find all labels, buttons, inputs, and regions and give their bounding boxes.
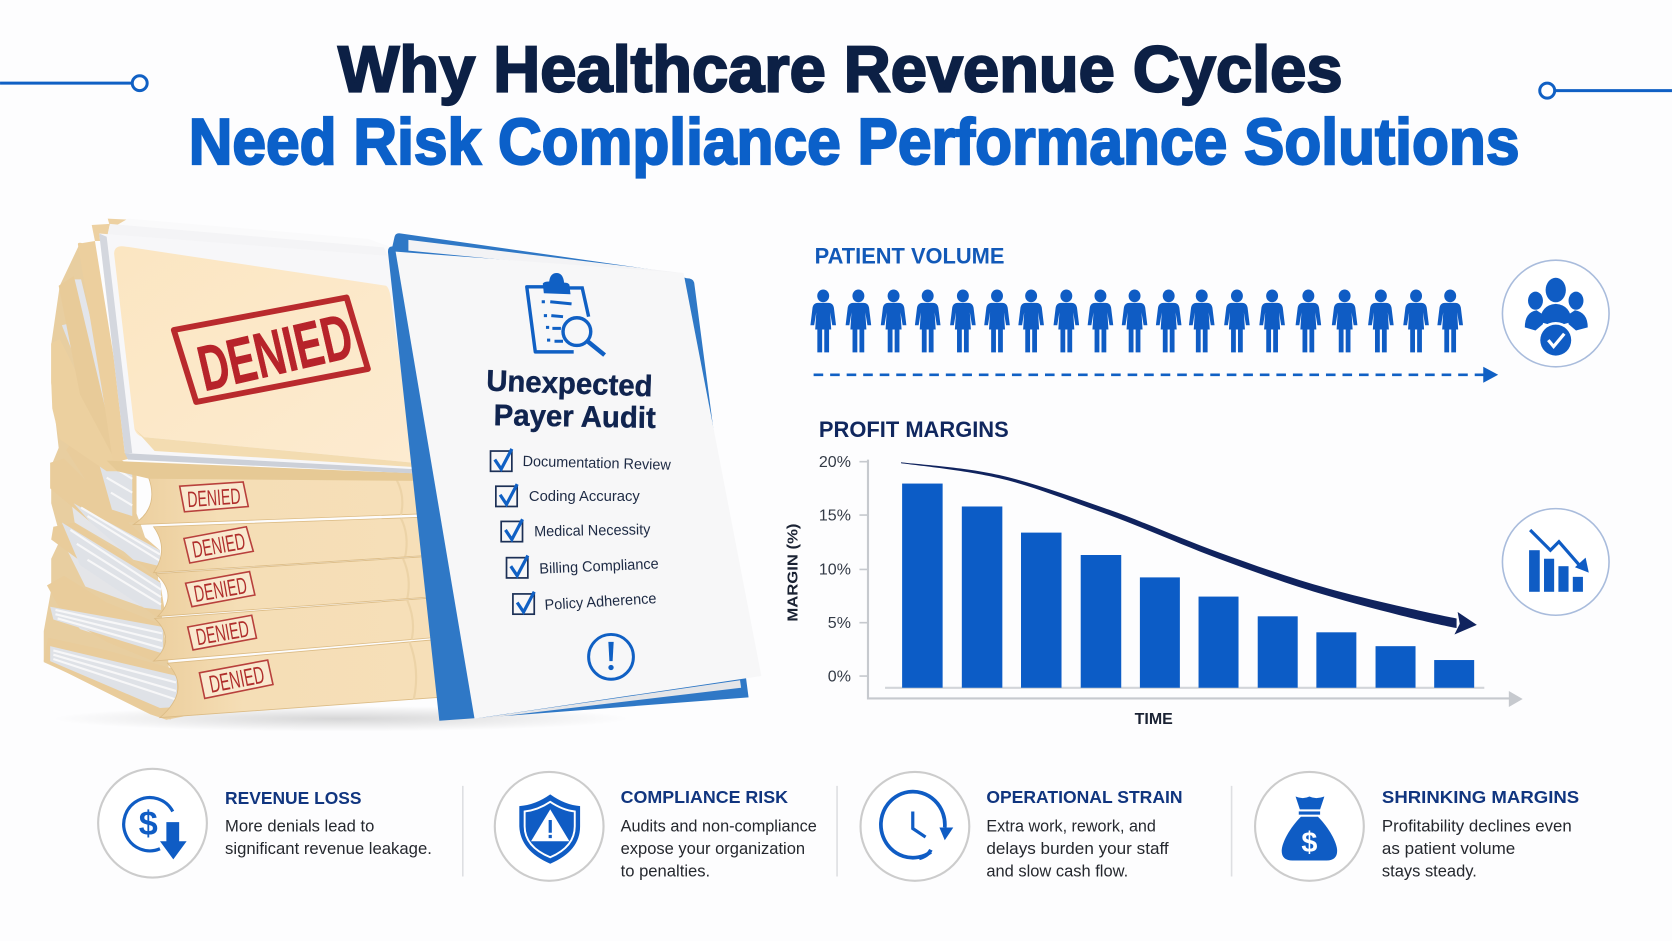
audit heading: Unexpected xyxy=(486,365,653,403)
description: revenue loss xyxy=(225,817,432,858)
description: compliance risk: to penalties. xyxy=(621,861,710,880)
icon: declining bar chart xyxy=(1502,509,1609,615)
x axis title: TIME xyxy=(1135,711,1173,728)
decorative left connector xyxy=(0,76,147,91)
top white paper sheets xyxy=(99,219,414,473)
icon: money bag: $ xyxy=(1301,827,1317,859)
description: operational strain: Extra work, rework, and xyxy=(986,817,1156,836)
description: shrinking margins: Profitability declines even xyxy=(1382,817,1572,836)
y axis title: MARGIN (%) xyxy=(785,524,802,622)
panel: patient volume xyxy=(810,243,1609,383)
y axis labels: 15% xyxy=(819,507,851,524)
y axis labels xyxy=(819,454,851,685)
folder band 5 with fanned papers xyxy=(44,638,439,720)
panel: revenue loss xyxy=(98,769,432,878)
audit heading: Payer Audit xyxy=(493,399,656,435)
illustration: stack of denied folders xyxy=(44,219,629,731)
folder band 5 with fanned papers: DENIED xyxy=(207,662,267,699)
icon: dollar with down arrow xyxy=(98,769,207,878)
panel: operational strain xyxy=(861,772,1183,881)
description: shrinking margins: as patient volume xyxy=(1382,839,1515,858)
icon: money bag xyxy=(1255,772,1364,881)
title xyxy=(189,33,1519,178)
heading: compliance risk: COMPLIANCE RISK xyxy=(621,787,788,807)
description: compliance risk: expose your organization xyxy=(621,839,805,858)
folder band 3 with fanned papers xyxy=(51,522,429,617)
y axis labels: 10% xyxy=(819,562,851,579)
row of 19 patient figures xyxy=(810,289,1463,352)
icon: dollar with down arrow: $ xyxy=(139,805,158,843)
description: compliance risk xyxy=(621,817,817,880)
description: revenue loss: significant revenue leakage. xyxy=(225,839,432,858)
description: revenue loss: More denials lead to xyxy=(225,817,374,836)
folder band 2 with fanned papers xyxy=(50,459,427,575)
panel: shrinking margins xyxy=(1255,772,1579,881)
paper xyxy=(396,252,761,719)
description: compliance risk: Audits and non-compliance xyxy=(621,817,817,836)
large front folder xyxy=(114,246,414,463)
folder band 4 with fanned papers: DENIED xyxy=(194,615,251,650)
description: shrinking margins xyxy=(1382,817,1572,880)
dividers xyxy=(463,786,1232,876)
checklist: Medical Necessity xyxy=(534,521,651,540)
description: shrinking margins: stays steady. xyxy=(1382,861,1477,880)
checklist: Billing Compliance xyxy=(539,555,659,578)
bar chart xyxy=(902,484,1474,688)
declining trend arrow xyxy=(901,462,1477,634)
checklist xyxy=(491,449,671,614)
title line 1: Why Healthcare Revenue Cycles xyxy=(338,33,1342,106)
description: operational strain: and slow cash flow. xyxy=(986,861,1128,880)
y axis labels: 20% xyxy=(819,454,851,471)
checklist: Policy Adherence xyxy=(544,590,657,614)
folder band 4 with fanned papers xyxy=(47,576,434,661)
blue folder xyxy=(388,233,749,721)
checklist: Coding Accuracy xyxy=(529,488,640,505)
big DENIED stamp: DENIED xyxy=(191,300,359,405)
illustration: unexpected payer audit document xyxy=(388,233,761,721)
upper fanned folder edges xyxy=(51,219,418,481)
panel: compliance risk xyxy=(495,772,817,881)
heading: shrinking margins: SHRINKING MARGINS xyxy=(1382,787,1579,807)
dashed arrow xyxy=(814,367,1498,383)
heading: revenue loss: REVENUE LOSS xyxy=(225,788,362,808)
description: operational strain: delays burden your staff xyxy=(986,839,1169,858)
heading: patient volume: PATIENT VOLUME xyxy=(815,243,1004,268)
y axis labels: 5% xyxy=(828,615,851,632)
heading: operational strain: OPERATIONAL STRAIN xyxy=(986,787,1183,807)
icon: exclamation alert xyxy=(589,634,633,679)
folder band 2 with fanned papers: DENIED xyxy=(190,528,247,563)
folder band 3 with fanned papers: DENIED xyxy=(192,572,249,607)
icon: patients with checkmark xyxy=(1502,260,1609,367)
description: operational strain xyxy=(986,817,1169,880)
decorative right connector xyxy=(1540,83,1672,98)
folder band 1 with fanned papers xyxy=(66,432,420,525)
axes xyxy=(859,460,1523,707)
heading: profit margins: PROFIT MARGINS xyxy=(819,417,1009,442)
big DENIED stamp xyxy=(174,297,368,405)
stack silhouette underlay xyxy=(44,245,171,720)
title line 2: Need Risk Compliance Performance Solutions xyxy=(189,105,1519,178)
icon: clipboard with magnifier xyxy=(527,273,605,355)
audit heading xyxy=(486,365,656,435)
icon: clock with circular arrow xyxy=(861,772,969,881)
folder band 1 with fanned papers: DENIED xyxy=(186,484,241,512)
icon: warning shield xyxy=(495,772,604,881)
checklist: Documentation Review xyxy=(522,453,671,474)
y axis labels: 0% xyxy=(828,668,851,685)
panel: profit margins xyxy=(785,417,1609,728)
back sheet of paper xyxy=(475,680,741,719)
